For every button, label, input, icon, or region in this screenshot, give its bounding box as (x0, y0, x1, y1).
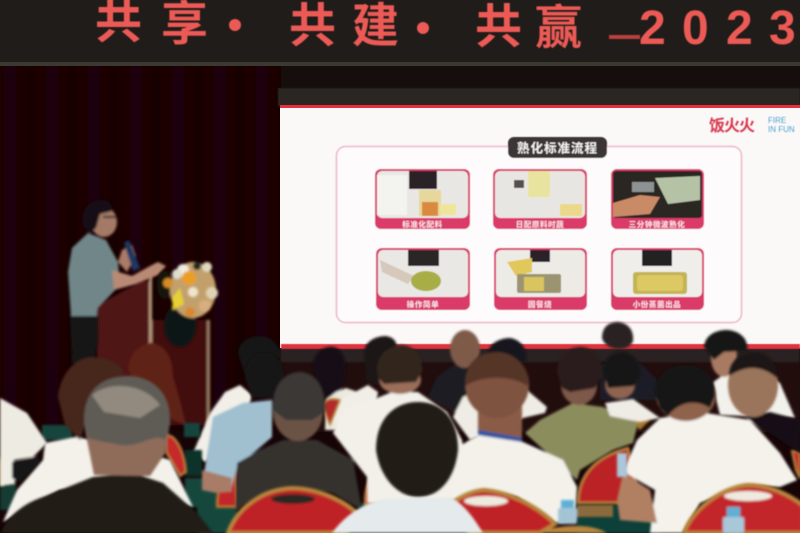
back row audience (128, 322, 795, 462)
man olive shirt (525, 403, 638, 480)
dark shirt through left chair (271, 494, 315, 504)
banner glyph 建: 建 (352, 0, 399, 52)
man shaved head (728, 353, 778, 417)
speaker (68, 200, 166, 364)
woman with auburn hair (128, 343, 186, 425)
speaker shirt (68, 233, 120, 316)
slide logo: FIRE (768, 116, 786, 125)
man dark shirt grey hair (236, 440, 362, 510)
tables (0, 423, 661, 533)
banner digit 3: 3 (769, 2, 796, 55)
front row audience (1, 376, 483, 533)
process card 3 (611, 169, 704, 229)
slide panel (336, 146, 742, 322)
front man black sweater (1, 473, 213, 533)
seated man white shirt left (193, 385, 252, 462)
notebook on table (577, 505, 613, 517)
man big white shirt (623, 412, 797, 533)
speaker head (91, 207, 117, 237)
curtain backdrop (0, 60, 800, 432)
man blue stripe shirt (202, 400, 272, 493)
slide title pill: 熟化标准流程 (517, 140, 598, 156)
slide logo: IN FUN (768, 125, 795, 134)
process card 6 (611, 248, 704, 310)
process card 1: 标准化配料 (402, 219, 443, 229)
process card 5: 圆餐烧 (528, 299, 552, 309)
slide logo (709, 116, 795, 135)
chair (0, 456, 4, 486)
process card 2: 日配原料时蔬 (516, 219, 564, 229)
banner glyph 共: 共 (475, 0, 522, 53)
white shirt through centre chair (464, 496, 508, 506)
left man white shirt (0, 398, 47, 486)
process card 2 (493, 169, 587, 229)
banner dot (229, 19, 241, 31)
speaker trousers (70, 315, 98, 364)
banner glyph 赢: 赢 (535, 1, 582, 54)
LED banner (0, 0, 800, 66)
speaker arm (112, 262, 166, 290)
slide logo: 饭火火 (709, 117, 755, 135)
banner glyph 共: 共 (289, 0, 336, 52)
chairs middle row (0, 399, 800, 507)
man black shirt right (745, 412, 800, 453)
man dark shirt far right (600, 356, 657, 400)
banner dash (609, 35, 640, 39)
chair (578, 448, 640, 503)
front row chairs (228, 453, 800, 533)
front man dark head (376, 402, 458, 497)
chair (217, 465, 237, 507)
banner digit 0: 0 (682, 2, 709, 55)
front man neck and head (84, 376, 170, 476)
man white shirt right centre (605, 399, 660, 422)
process card 6: 小份蒸菌出品 (633, 299, 681, 309)
water bottle small (617, 453, 627, 477)
front chair right (684, 485, 800, 533)
man grey hair head (273, 381, 323, 441)
banner dot (417, 22, 429, 34)
man behind white shirt (488, 338, 526, 372)
water bottle (723, 507, 744, 533)
man white shirt centre (333, 392, 470, 505)
speaker microphone (124, 240, 140, 271)
front chair low (540, 526, 607, 533)
man white shirt tall (448, 435, 577, 523)
process card 4: 操作简单 (407, 299, 439, 309)
water bottle (558, 500, 577, 524)
front man white shirt centre (332, 498, 483, 533)
man big white arm (617, 473, 657, 523)
chair (322, 399, 340, 425)
bald man dark shirt (428, 362, 488, 412)
banner digit 2: 2 (639, 2, 666, 55)
chair (365, 468, 388, 505)
woman with brown hair (3, 357, 193, 522)
man head (656, 369, 716, 421)
process card 3: 三分钟微波熟化 (629, 219, 685, 229)
process card 5 (494, 248, 587, 310)
podium (96, 275, 210, 425)
chair (628, 416, 650, 430)
process card 1 (375, 169, 470, 229)
flower arrangement (157, 262, 218, 347)
white shirt through right chair (724, 491, 772, 501)
woman black hair (313, 347, 346, 402)
banner digit 2: 2 (726, 2, 753, 55)
man black hair at centre (364, 336, 397, 385)
middle row audience (0, 345, 800, 533)
process card 4 (376, 248, 470, 310)
projection screen (278, 88, 800, 349)
slide title pill (508, 137, 607, 158)
front chair left (228, 488, 362, 533)
front chair centre (449, 490, 555, 533)
lanyard (478, 430, 522, 442)
chair (165, 435, 186, 476)
man white shirt far right (712, 370, 795, 418)
chair (792, 451, 800, 478)
